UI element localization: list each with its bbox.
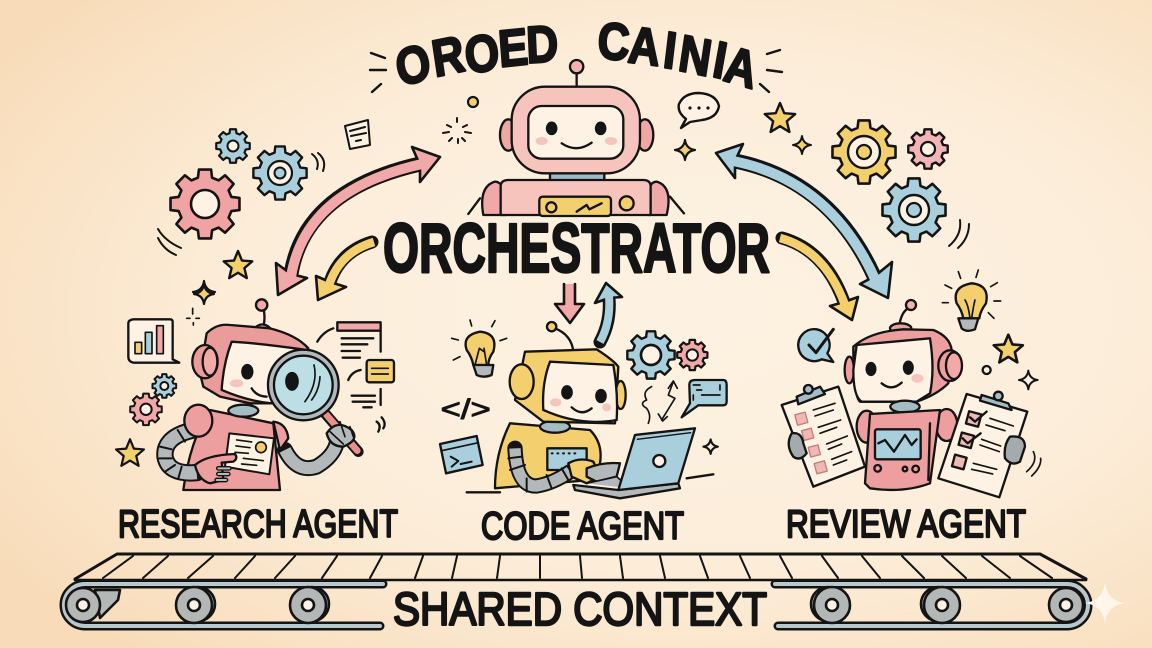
- left rollers: [66, 587, 329, 623]
- torso: [183, 410, 280, 490]
- belt top surface: [75, 554, 1086, 580]
- icon: sparkle: [703, 439, 718, 454]
- shoulders: [857, 411, 877, 443]
- icon: motion marks: [949, 220, 969, 248]
- antenna: [899, 300, 916, 325]
- torso: [495, 423, 601, 488]
- arrow: blue orchestrator to review: [716, 144, 892, 298]
- gears left: [158, 120, 370, 303]
- left belt band: [64, 584, 383, 626]
- review agent robot: [782, 270, 1041, 497]
- card: [225, 433, 274, 474]
- orchestrator robot: [468, 60, 684, 216]
- arrow: pink down to code agent: [555, 284, 584, 323]
- icon: star: [765, 103, 795, 132]
- icon: small blue gear: [216, 129, 250, 163]
- icon: yellow gear: [832, 120, 896, 184]
- icon: burst: [187, 308, 199, 325]
- icon: star: [116, 439, 144, 466]
- icon: gears: [130, 374, 176, 425]
- hand: [568, 460, 600, 483]
- head: [515, 349, 618, 423]
- research agent robot: [116, 284, 394, 490]
- arm: [515, 448, 570, 486]
- icon: chart bubble: [128, 319, 179, 363]
- left arm: [165, 430, 197, 473]
- head: [853, 329, 952, 402]
- icon: sparkle: [1019, 371, 1038, 389]
- icon: speech bubble: [679, 93, 719, 128]
- icon: lightbulb: [452, 320, 507, 377]
- pointing hand: [195, 454, 236, 483]
- gears right: [765, 103, 969, 248]
- icon: magnifying glass: [268, 350, 358, 452]
- icon: burst: [443, 118, 471, 143]
- right arm: [285, 443, 337, 468]
- label: shared context: SHARED CONTEXT: [393, 583, 767, 635]
- icon: blue gear: [882, 178, 946, 242]
- title: OROED CAINIA: CAINIA: [596, 12, 762, 101]
- left hand: [789, 433, 807, 459]
- arrow: yellow orchestrator to review: [780, 238, 858, 320]
- title: OROED CAINIA: [390, 12, 762, 101]
- code agent robot: [440, 320, 727, 498]
- icon: circle: [983, 366, 991, 374]
- arrow: yellow orchestrator to research: [316, 242, 374, 300]
- conveyor belt: [64, 554, 1088, 626]
- icon: check badge: [798, 329, 833, 362]
- hand: [327, 422, 354, 447]
- title: OROED CAINIA: OROED: [390, 15, 559, 99]
- icon: yellow note: [367, 360, 394, 382]
- antenna: [547, 322, 573, 352]
- arrow: blue up from code agent: [595, 283, 622, 342]
- icon: sparkle: [194, 284, 214, 304]
- right hand: [1005, 436, 1025, 464]
- right clipboard: [938, 392, 1027, 497]
- arrow: pink orchestrator to research: [276, 147, 440, 295]
- left clipboard: [782, 385, 865, 487]
- torso: [865, 410, 940, 490]
- icon: pink gear: [908, 129, 948, 169]
- icon: document: [317, 322, 385, 432]
- title burst marks: [370, 50, 782, 92]
- icon: small circle: [468, 97, 478, 107]
- icon: star: [994, 335, 1023, 362]
- icon: code bubble: [682, 380, 727, 417]
- icon: sparkle: [675, 140, 695, 160]
- label: research agent: RESEARCH AGENT: [118, 503, 398, 546]
- watermark sparkle: [1085, 583, 1125, 623]
- right belt band: [775, 584, 1088, 626]
- icon: gears: [627, 331, 707, 379]
- icon: terminal window: [440, 436, 483, 473]
- icon: flow marks: [642, 381, 677, 423]
- icon: motion marks: [158, 153, 324, 255]
- icon: laptop: [573, 428, 695, 498]
- decoration near orchestrator: [443, 93, 719, 160]
- icon: blue gear: [253, 146, 307, 200]
- icon: antenna: [256, 299, 267, 323]
- right rollers: [811, 587, 1083, 623]
- label: code agent: CODE AGENT: [481, 505, 684, 548]
- icon: sparkle: [793, 136, 811, 154]
- icon: note: [345, 120, 370, 149]
- icon: lightbulb: [942, 270, 1001, 331]
- label: review agent: REVIEW AGENT: [786, 503, 1026, 546]
- code tag: </>: [441, 394, 491, 425]
- table lines: [467, 474, 713, 492]
- icon: motion marks: [1027, 452, 1041, 476]
- icon: sparkle: [193, 281, 215, 303]
- heading: ORCHESTRATOR: ORCHESTRATOR: [383, 209, 770, 287]
- icon: star: [224, 251, 252, 278]
- icon: pink gear: [171, 170, 239, 238]
